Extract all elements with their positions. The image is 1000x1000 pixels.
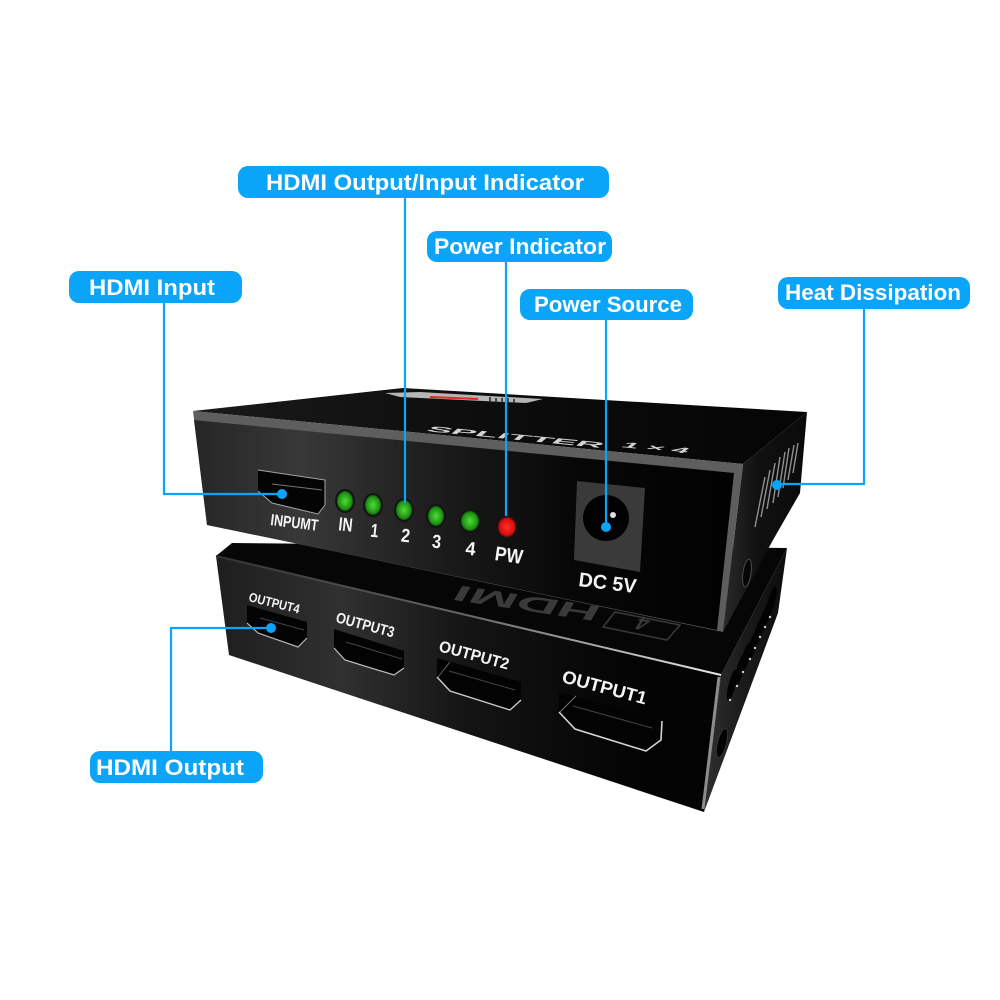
callout: Power Source [520,289,693,532]
upper splitter unit [193,388,807,632]
callout: Power Indicator: Power Indicator [434,234,606,259]
label: DC 5V: DC 5V [577,569,638,598]
lower unit side vents [725,586,779,701]
lower unit side face [704,548,787,812]
upper unit top face [193,388,807,464]
LED labels: 1 [369,521,380,542]
embossed 4 HDMI mark: HDMI [448,581,606,626]
callout: Power Source: Power Source [534,292,682,317]
embossed 4 HDMI mark: 4 [631,612,655,634]
lower unit side screw [714,727,730,759]
port: OUTPUT2: OUTPUT2 [437,638,511,674]
SPLITTER 1x4 top print: 1 × 4 [617,441,694,456]
port: OUTPUT3: OUTPUT3 [334,609,396,641]
upper unit front face [193,411,743,632]
vent highlights [729,616,771,701]
upper unit side screw [741,559,753,587]
upper unit side face [723,412,807,632]
LED labels: 3 [431,532,442,553]
LED labels: IN [338,514,354,537]
LED labels [338,514,524,569]
port: OUTPUT1: OUTPUT1 [560,667,649,708]
brand logo [385,392,543,403]
SPLITTER 1x4 top print: SPLITTER [422,425,607,450]
port: HDMI input [258,470,325,514]
port: OUTPUT3 [334,609,404,675]
callout: HDMI Output [90,623,276,783]
heat dissipation vents [755,443,798,527]
port: OUTPUT1 [559,667,662,751]
callout: HDMI Input: HDMI Input [89,275,216,300]
LED labels: 4 [465,539,477,561]
lower unit front face [216,556,721,812]
SPLITTER 1x4 top print [422,425,694,456]
embossed 4 HDMI mark [448,581,680,640]
LED indicators [336,490,517,538]
callout: Heat Dissipation [772,277,970,490]
callout: HDMI Output/Input Indicator [238,166,609,503]
port: OUTPUT4 [247,589,307,647]
port: OUTPUT4: OUTPUT4 [247,589,302,617]
callout: Heat Dissipation: Heat Dissipation [785,280,961,305]
port: OUTPUT2 [437,638,521,710]
lower unit top face [216,543,787,675]
LED labels: PW [493,543,524,569]
callout: Power Indicator [427,231,612,516]
LED labels: 2 [400,526,411,547]
lower splitter unit [216,543,787,812]
callout: HDMI Output: HDMI Output [96,755,245,780]
callout: HDMI Input [69,271,287,499]
DC 5V power jack [574,481,645,572]
callout: HDMI Output/Input Indicator: HDMI Output/Input Indicator [266,170,584,195]
label: INPUMT: INPUMT [270,512,319,535]
